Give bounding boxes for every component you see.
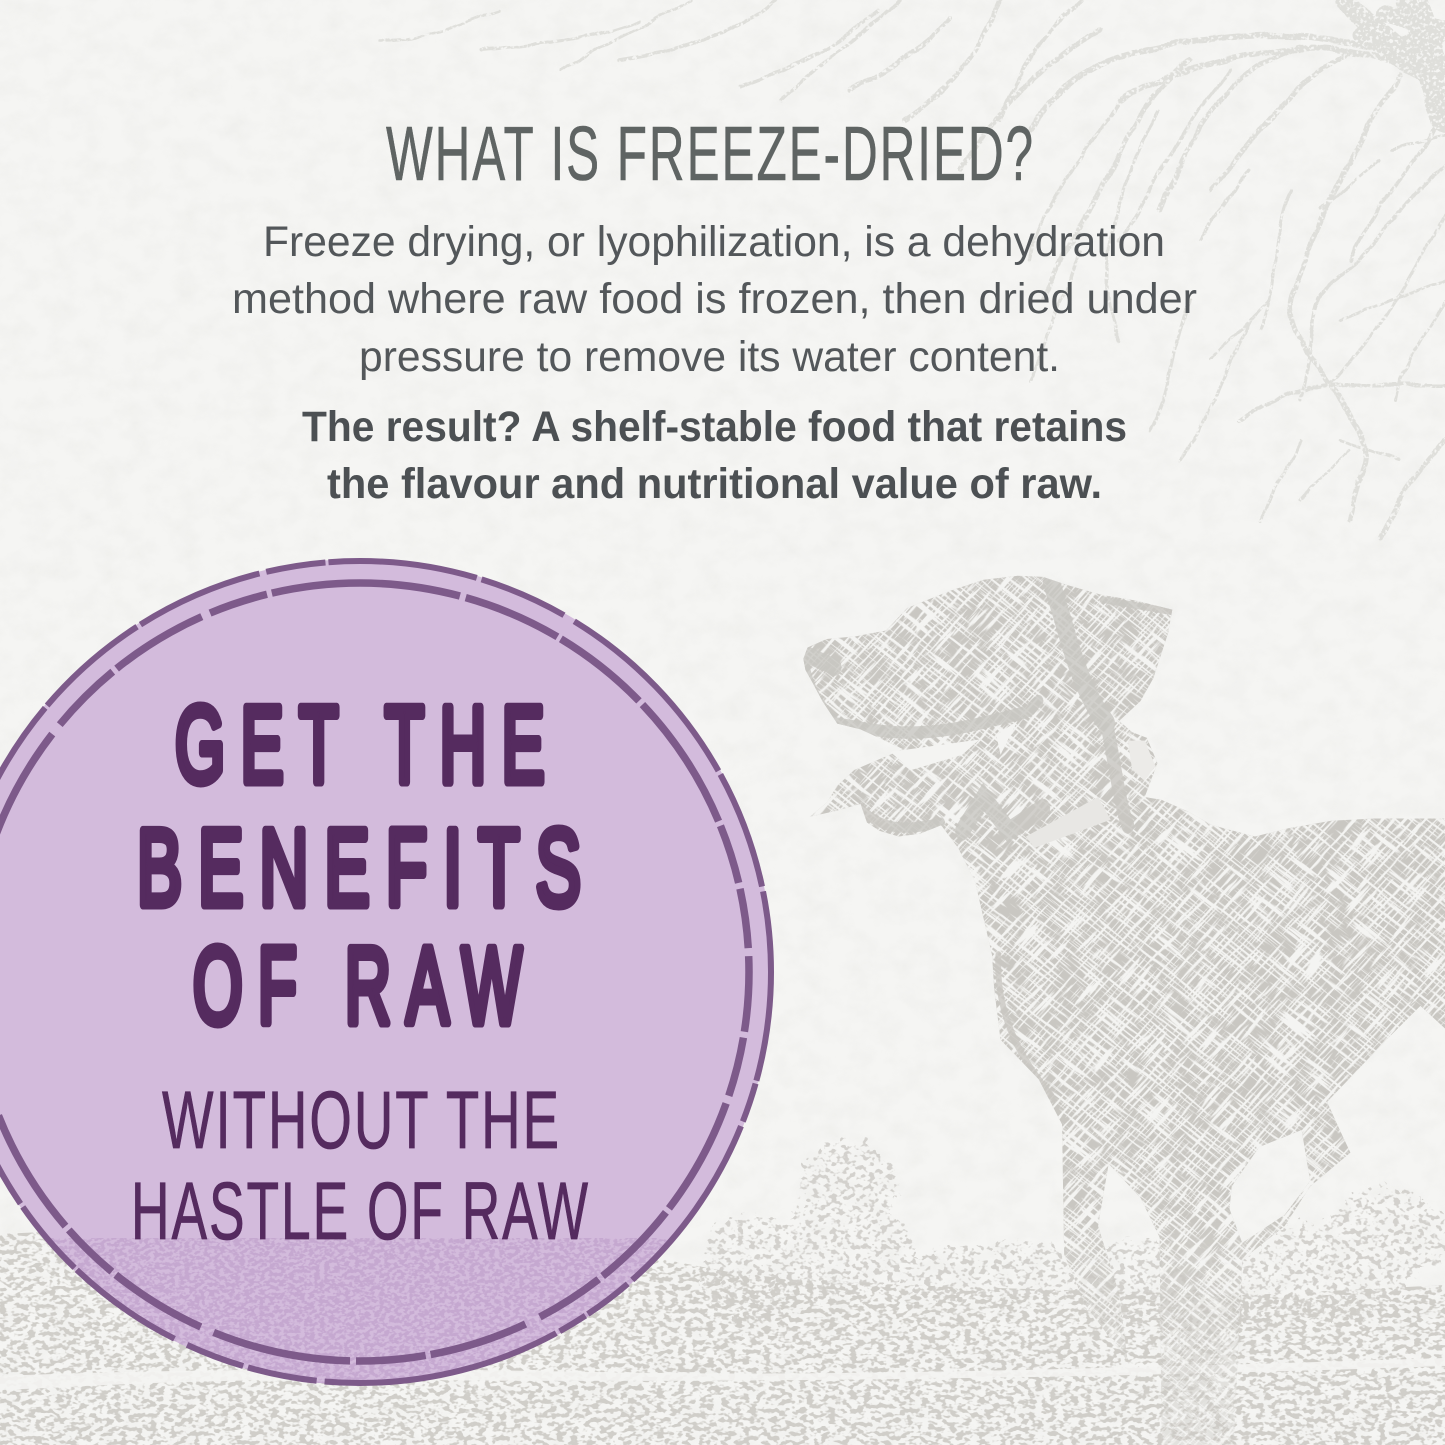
- bold result text: [302, 403, 1127, 508]
- dog silhouette: [780, 560, 1445, 1445]
- badge inner ring: [0, 583, 749, 1361]
- bold result text: The result? A shelf-stable food that retains: [302, 403, 1127, 451]
- subhead: without the hastle of raw: HASTLE OF RAW: [131, 1166, 590, 1257]
- bold result text: the flavour and nutritional value of raw.: [327, 460, 1102, 508]
- purple badge: [0, 559, 773, 1388]
- tree branches illustration: [380, 0, 1445, 540]
- subhead: without the hastle of raw: WITHOUT THE: [162, 1075, 561, 1166]
- headline: get the benefits of raw: GET THE: [175, 684, 560, 806]
- body text: [232, 218, 1197, 381]
- title: WHAT IS FREEZE-DRIED?: [386, 111, 1035, 197]
- dog markings: [805, 583, 1172, 1096]
- dog collar: [1026, 797, 1111, 848]
- horizon band: [0, 1358, 1445, 1390]
- subhead: without the hastle of raw: [131, 1075, 590, 1257]
- headline: get the benefits of raw: [137, 684, 597, 1047]
- body text: Freeze drying, or lyophilization, is a dehydration: [263, 218, 1165, 266]
- dog tag: [1128, 741, 1155, 780]
- body text: pressure to remove its water content.: [359, 333, 1060, 381]
- headline: get the benefits of raw: BENEFITS: [137, 807, 597, 929]
- landscape showing through badge: [51, 1238, 668, 1384]
- dog body fill: [780, 560, 1445, 1445]
- ground texture: [0, 1228, 1445, 1445]
- badge disc: [0, 559, 773, 1385]
- body text: method where raw food is frozen, then dried under: [232, 275, 1197, 323]
- badge outer ring: [0, 561, 771, 1383]
- dog scratch texture: [780, 560, 1445, 1445]
- bushes and trees: [700, 1140, 1445, 1325]
- dog mouth: [890, 721, 1017, 770]
- landscape illustration: [0, 1140, 1445, 1445]
- headline: get the benefits of raw: OF RAW: [193, 925, 537, 1047]
